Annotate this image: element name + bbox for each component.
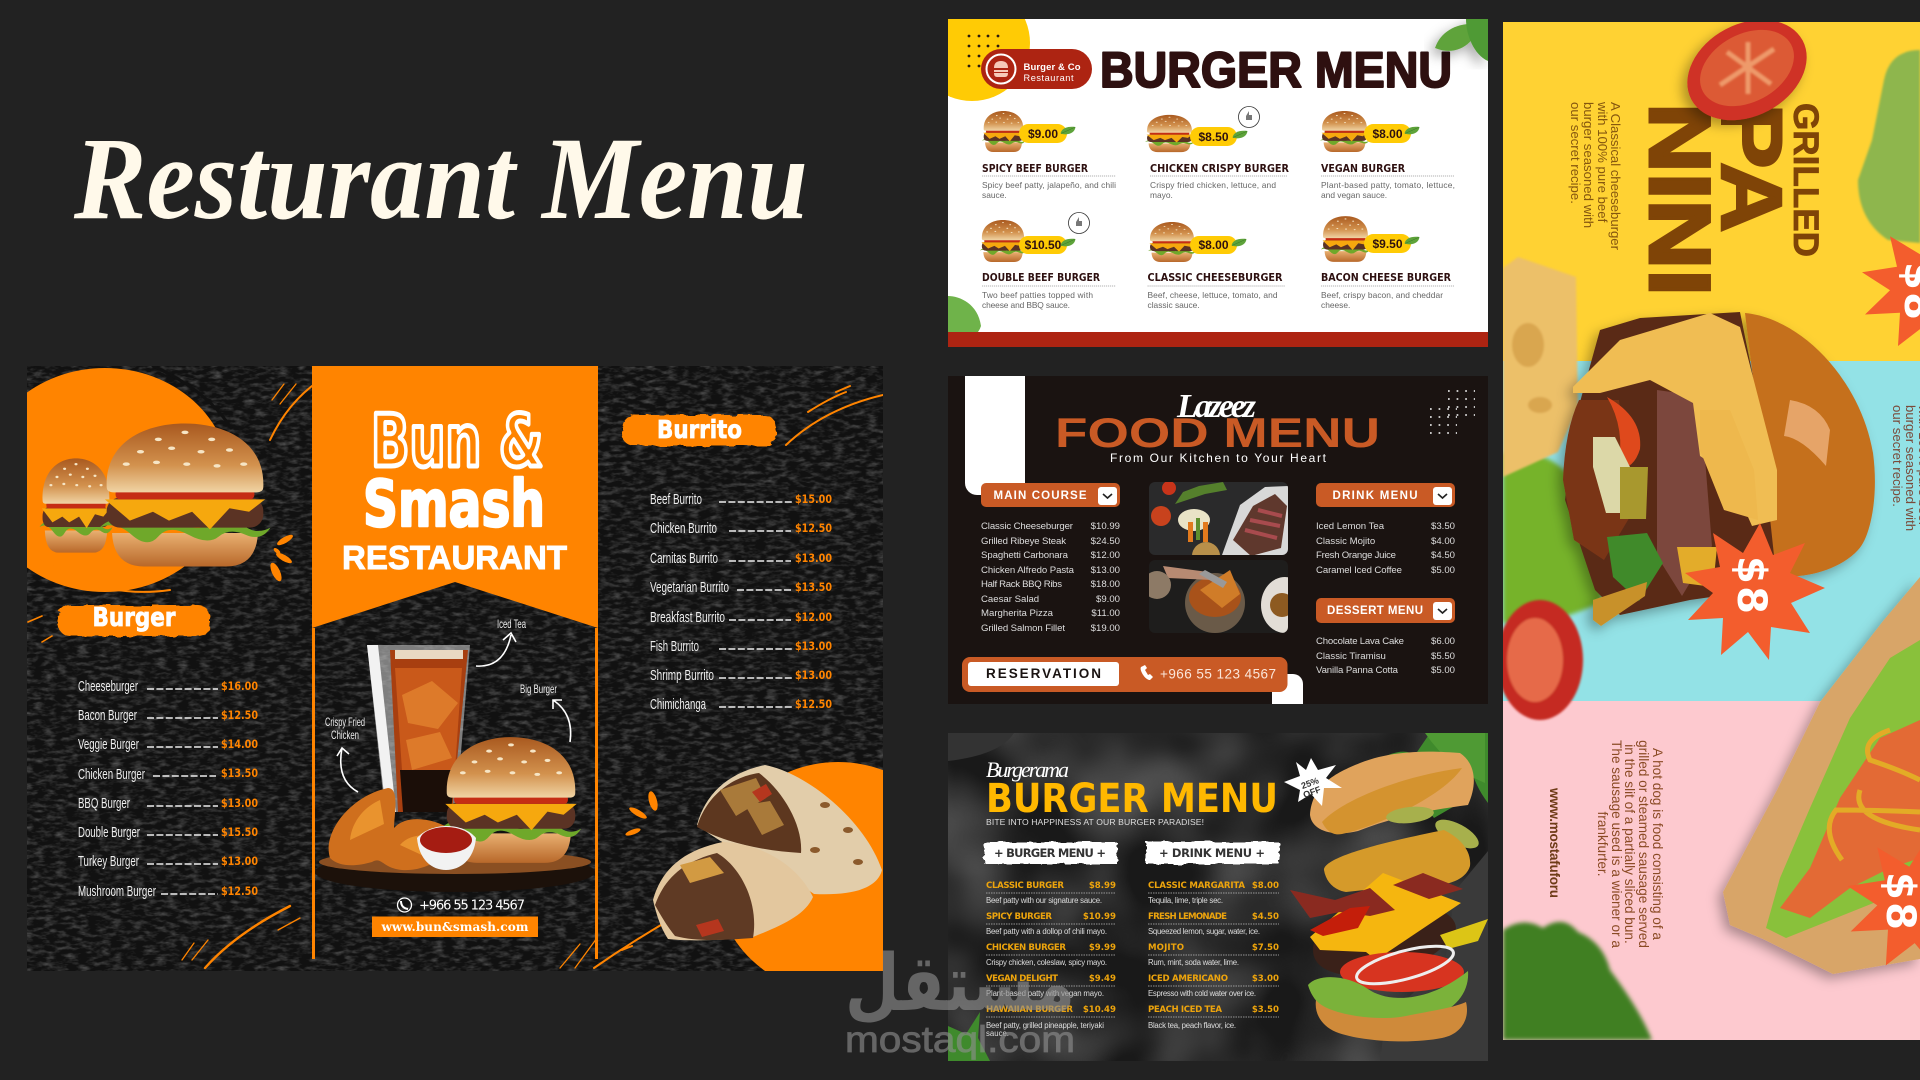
item: Chicken Crispy Burger: CHICKEN CRISPY BURGER: [1150, 163, 1289, 175]
icon: basil leaves bottom left: [948, 296, 981, 332]
description: blue panel: [1890, 404, 1920, 531]
burrito price list: Fish Burrito: [650, 638, 699, 655]
dessert menu list: Chocolate Lava Cake: [1316, 636, 1404, 647]
website text: www.mostafuforu: [1547, 787, 1562, 898]
drink list: $3.00: [1252, 974, 1279, 984]
website box: [372, 916, 538, 937]
section label: Burger: [58, 603, 210, 636]
bottom red bar: [948, 332, 1488, 347]
item: Spicy Beef Burger: sauce.: [982, 190, 1007, 200]
dessert menu list: $6.00: [1431, 636, 1455, 647]
burrito price list: $13.00: [795, 668, 832, 682]
burger list: $9.49: [1089, 974, 1116, 984]
starburst: 25% off: OFF: [1302, 784, 1323, 800]
burger list: Plant-based patty with vegan mayo.: [986, 989, 1104, 998]
white tab top: [965, 376, 1025, 495]
drink list: MOJITO: [1148, 943, 1184, 953]
heading: BURGER MENU: [1100, 42, 1452, 98]
item: Vegan Burger: Plant-based patty, tomato, lettuce,: [1321, 180, 1455, 190]
brand logo text: [344, 410, 568, 570]
item: Chicken Crispy Burger: $8.50: [1198, 130, 1229, 144]
item: Spicy Beef Burger: SPICY BEEF BURGER: [982, 163, 1088, 175]
brush streaks around circle: [28, 366, 883, 968]
burger price list: $12.50: [221, 884, 258, 898]
main course list: $11.00: [1091, 608, 1120, 619]
item: Bacon Cheese Burger: BACON CHEESE BURGER: [1321, 272, 1451, 284]
burrito price list: $12.50: [795, 521, 832, 535]
burger list: HAWAIIAN BURGER: [986, 1005, 1073, 1015]
item: Bacon Cheese Burger: $9.50: [1372, 237, 1403, 251]
item: Vegan Burger: $8.00: [1372, 127, 1403, 141]
description: panini: with 100% pure beef: [1595, 101, 1610, 223]
phone contact: +966 55 123 4567: [419, 898, 525, 914]
watermark: mostaql: [845, 939, 1075, 1060]
callout: Crispy Fried Chicken: Chicken: [331, 728, 359, 742]
price starburst: middle: $8: [1728, 556, 1774, 614]
main course list: Half Rack BBQ Ribs: [981, 579, 1062, 590]
burrito price list: $12.50: [795, 697, 832, 711]
item: Spicy Beef Burger: [982, 111, 1116, 200]
drink menu list: Caramel Iced Coffee: [1316, 565, 1402, 576]
burrito price list: Shrimp Burrito: [650, 667, 714, 684]
brand script: Lazeez: [1176, 388, 1257, 425]
drink menu list: $4.00: [1431, 536, 1455, 547]
item: Double Beef Burger: $10.50: [1025, 238, 1062, 252]
icon: grilled burger: [1563, 312, 1875, 626]
burrito price list: $15.00: [795, 492, 832, 506]
logo pill: Burger & Co: [1024, 62, 1081, 73]
drink list: Espresso with cold water over ice.: [1148, 989, 1256, 998]
orange circle behind burger: [27, 368, 216, 592]
burger price list: Chicken Burger: [78, 766, 145, 783]
price starburst: top: [1862, 227, 1920, 350]
main course list: $19.00: [1091, 623, 1120, 634]
dessert menu list: DESSERT MENU: [1327, 605, 1423, 617]
icon: large burger: [100, 424, 270, 566]
drink list: FRESH LEMONADE: [1148, 912, 1227, 922]
main course list: Classic Cheeseburger: [981, 521, 1074, 532]
drink menu list: DRINK MENU: [1332, 490, 1418, 502]
description: blue panel: our secret recipe.: [1890, 405, 1905, 507]
dessert menu list: $5.00: [1431, 665, 1455, 676]
heading: BURGER MENU: [986, 776, 1278, 822]
panel: Bun and Smash trifold menu: [27, 366, 883, 971]
watermark: mostaql: mostaql.com: [845, 1019, 1075, 1060]
burger list: $8.99: [1089, 881, 1116, 891]
burger price list: Double Burger: [78, 824, 140, 841]
item: Bacon Cheese Burger: [1321, 216, 1454, 310]
burger list: $10.49: [1083, 1005, 1116, 1015]
panel: Burgerama chalkboard menu: [948, 733, 1488, 1061]
burger list: $9.99: [1089, 943, 1116, 953]
burger price list: $15.50: [221, 825, 258, 839]
item: Vegan Burger: and vegan sauce.: [1321, 190, 1387, 200]
logo pill: Restaurant: [1024, 73, 1074, 83]
item: Classic Cheeseburger: classic sauce.: [1148, 300, 1200, 310]
drink list: PEACH ICED TEA: [1148, 1005, 1222, 1015]
icon: hot dog: [1723, 577, 1920, 974]
icon: small burger: [40, 458, 112, 553]
section label: Burger: Burger: [92, 603, 176, 633]
item: Vegan Burger: VEGAN BURGER: [1321, 163, 1405, 175]
leaves bottom left: [948, 1012, 990, 1061]
description: blue panel: burger seasoned with: [1903, 405, 1918, 531]
panel: Grilled Panini colour-block flyer: [1497, 0, 1920, 1040]
icon: tomato slice left: [1497, 600, 1583, 720]
price starburst: middle: [1685, 523, 1825, 660]
heading: GRILLED: GRILLED: [1786, 103, 1825, 257]
burger price list: Cheeseburger: [78, 678, 138, 695]
burger list: VEGAN DELIGHT: [986, 974, 1058, 984]
icon: lettuce left: [1503, 452, 1602, 623]
main course list: $13.00: [1091, 565, 1120, 576]
watermark: mostaql: مستقل: [845, 939, 1075, 1029]
item: Vegan Burger: [1320, 111, 1455, 200]
center column orange chevron header: [312, 366, 598, 628]
description: panini: A Classical cheeseburger: [1608, 102, 1623, 251]
main course list: Margherita Pizza: [981, 608, 1054, 619]
tagline: BITE INTO HAPPINESS AT OUR BURGER PARADISE!: [986, 817, 1204, 827]
main course list: Spaghetti Carbonara: [981, 550, 1069, 561]
main course list: MAIN COURSE: [994, 490, 1087, 502]
burger price list: Mushroom Burger: [78, 883, 156, 900]
callout: Big Burger: Big Burger: [520, 682, 557, 696]
starburst: 25% off: [1284, 758, 1342, 806]
description: hot dog: grilled or steamed sausage served: [1636, 740, 1651, 948]
drink menu list: $5.00: [1431, 565, 1455, 576]
heading: FOOD MENU: [1055, 409, 1380, 456]
callout: Crispy Fried Chicken: Crispy Fried: [325, 715, 365, 729]
item: Classic Cheeseburger: CLASSIC CHEESEBURGER: [1148, 272, 1282, 284]
dot pattern: [1430, 391, 1475, 433]
drink list: Tequila, lime, triple sec.: [1148, 896, 1223, 905]
item: Classic Cheeseburger: [1148, 222, 1285, 310]
dessert menu list: $5.50: [1431, 651, 1455, 662]
exploded burger illustration: [1290, 733, 1488, 1041]
burger price list: Turkey Burger: [78, 853, 139, 870]
burrito price list: Breakfast Burrito: [650, 609, 725, 626]
dot grid: [968, 35, 999, 67]
burrito price list: Vegetarian Burrito: [650, 579, 729, 596]
burger list: $10.99: [1083, 912, 1116, 922]
section label: Burrito: [622, 415, 776, 446]
icon: tomato slice top: [1670, 0, 1824, 140]
drink menu list: Iced Lemon Tea: [1316, 521, 1385, 532]
panel: white Burger Menu: [948, 19, 1488, 347]
brand logo text: RESTAURANT: [342, 539, 567, 576]
burger list: [986, 881, 1116, 1038]
burrito price list: $12.00: [795, 610, 832, 624]
logo pill: [981, 49, 1092, 89]
main course list: Grilled Salmon Fillet: [981, 623, 1065, 634]
item: Chicken Crispy Burger: Crispy fried chicken, lettuce, and: [1150, 180, 1276, 190]
main course list: $18.00: [1091, 579, 1120, 590]
drink menu list: $4.50: [1431, 550, 1455, 561]
brand script: Burgerama: [986, 757, 1069, 782]
burger list: Beef patty with a dollop of chili mayo.: [986, 927, 1107, 936]
drink list: Black tea, peach flavor, ice.: [1148, 1021, 1236, 1030]
drink list: [1148, 881, 1279, 1030]
drink list: $7.50: [1252, 943, 1279, 953]
item: Double Beef Burger: cheese and BBQ sauce.: [982, 300, 1070, 310]
burger price list: [78, 678, 258, 900]
description: hot dog: [1595, 740, 1665, 948]
burger list: Beef patty, grilled pineapple, teriyaki: [986, 1021, 1104, 1030]
main course list: $12.00: [1091, 550, 1120, 561]
drink list: $3.50: [1252, 1005, 1279, 1015]
orange circle behind burrito: [722, 762, 883, 971]
drink list: Rum, mint, soda water, lime.: [1148, 958, 1239, 967]
main course list: $24.50: [1091, 536, 1120, 547]
dessert menu list: Vanilla Panna Cotta: [1316, 665, 1399, 676]
item: Bacon Cheese Burger: cheese.: [1321, 300, 1350, 310]
website box: www.bun&smash.com: [380, 920, 529, 934]
section label: Burrito: Burrito: [657, 415, 742, 444]
icon: basil leaves top right: [1435, 19, 1488, 61]
reservation bar: [962, 657, 1288, 692]
brush label: burger menu: + BURGER MENU +: [994, 846, 1106, 860]
callout: Big Burger: [520, 682, 571, 742]
brush label: drink menu: + DRINK MENU +: [1159, 846, 1265, 860]
heading: PA: PA: [1703, 103, 1799, 233]
subtitle: From Our Kitchen to Your Heart: [1110, 451, 1327, 465]
icon: lettuce right: [1858, 50, 1920, 243]
brand logo text: Smash: [363, 468, 545, 542]
burger price list: Veggie Burger: [78, 736, 139, 753]
drink list: $4.50: [1252, 912, 1279, 922]
dessert menu list: [1316, 598, 1455, 676]
item: Chicken Crispy Burger: mayo.: [1150, 190, 1173, 200]
price starburst: bottom: [1847, 838, 1920, 970]
main course list: $9.00: [1096, 594, 1120, 605]
item: Bacon Cheese Burger: Beef, crispy bacon, and cheddar: [1321, 290, 1443, 300]
burger list: Crispy chicken, coleslaw, spicy mayo.: [986, 958, 1107, 967]
burger list: CLASSIC BURGER: [986, 881, 1064, 891]
panel: Lazeez Food Menu: [948, 376, 1488, 704]
item: Classic Cheeseburger: Beef, cheese, lettuce, tomato, and: [1148, 290, 1278, 300]
burrito price list: Chicken Burrito: [650, 520, 717, 537]
burger price list: $13.50: [221, 766, 258, 780]
drink list: Squeezed lemon, sugar, water, ice.: [1148, 927, 1260, 936]
burger price list: $12.50: [221, 708, 258, 722]
brush label: drink menu: [1146, 842, 1279, 864]
burger list: Beef patty with our signature sauce.: [986, 896, 1102, 905]
drink menu list: [1316, 483, 1455, 576]
main course list: [981, 483, 1120, 634]
main course list: Caesar Salad: [981, 594, 1039, 605]
item: Spicy Beef Burger: $9.00: [1028, 127, 1058, 141]
drink menu list: Classic Mojito: [1316, 536, 1375, 547]
main course list: $10.99: [1091, 521, 1120, 532]
burrito price list: Beef Burrito: [650, 491, 702, 508]
drink list: CLASSIC MARGARITA: [1148, 881, 1245, 891]
brand logo text: Bun &: [371, 399, 543, 483]
description: hot dog: A hot dog is food consisting of a: [1650, 748, 1665, 940]
callout: Iced Tea: [476, 617, 526, 666]
item: Double Beef Burger: [980, 212, 1116, 310]
burger price list: $16.00: [221, 679, 258, 693]
burrito price list: $13.50: [795, 580, 832, 594]
grey brush corners: [1380, 851, 1488, 1061]
burrito price list: Chimichanga: [650, 696, 706, 713]
burrito price list: $13.00: [795, 639, 832, 653]
burrito price list: Carnitas Burrito: [650, 550, 718, 567]
burger price list: $13.00: [221, 854, 258, 868]
description: hot dog: The sausage used is a wiener or a: [1609, 740, 1624, 948]
drink list: ICED AMERICANO: [1148, 974, 1228, 984]
drink menu list: $3.50: [1431, 521, 1455, 532]
description: panini: our secret recipe.: [1568, 102, 1583, 204]
title: Resturant Menu: [73, 113, 808, 244]
main course list: Chicken Alfredo Pasta: [981, 565, 1075, 576]
icon: cheese wedge: [1503, 257, 1578, 477]
reservation bar: +966 55 123 4567: [1160, 666, 1276, 682]
reservation bar: RESERVATION: [986, 666, 1101, 681]
burrito price list: [650, 491, 832, 713]
burrito splash marks: [625, 790, 659, 837]
item: Double Beef Burger: Two beef patties topped with: [982, 290, 1093, 300]
starburst: 25% off: 25%: [1300, 775, 1320, 791]
description: panini: [1568, 101, 1623, 251]
heading: NINI: NINI: [1631, 103, 1727, 296]
burger price list: $13.00: [221, 796, 258, 810]
photo: roast chicken platter: [1143, 560, 1309, 633]
description: hot dog: in the slit of a partially sliced bun.: [1622, 744, 1637, 944]
burger price list: BBQ Burger: [78, 795, 130, 812]
drink list: $8.00: [1252, 881, 1279, 891]
orange splash marks: [270, 534, 293, 582]
item: Chicken Crispy Burger: [1145, 106, 1289, 200]
icon: wrapped burritos: [653, 765, 882, 940]
burger price list: Bacon Burger: [78, 707, 137, 724]
meal illustration: iced tea, fried chicken, burger: [315, 645, 595, 892]
icon: lettuce bottom: [1503, 922, 1652, 1040]
photo: steak and vegetables: [1149, 481, 1288, 570]
description: hot dog: frankfurter.: [1595, 812, 1610, 876]
brush label: burger menu: [984, 842, 1117, 864]
white tab bottom: [1272, 674, 1303, 704]
item: Spicy Beef Burger: Spicy beef patty, jalapeño, and chili: [982, 180, 1116, 190]
description: panini: burger seasoned with: [1581, 102, 1596, 228]
callout: Crispy Fried Chicken: [325, 715, 365, 792]
drink menu list: Fresh Orange Juice: [1316, 550, 1396, 561]
burrito price list: $13.00: [795, 551, 832, 565]
callout: Iced Tea: Iced Tea: [497, 617, 526, 631]
burger list: SPICY BURGER: [986, 912, 1052, 922]
item: Classic Cheeseburger: $8.00: [1198, 238, 1229, 252]
burger list: CHICKEN BURGER: [986, 943, 1066, 953]
dessert menu list: Classic Tiramisu: [1316, 651, 1386, 662]
burger list: sauce.: [986, 1029, 1009, 1038]
burger price list: $14.00: [221, 737, 258, 751]
main course list: Grilled Ribeye Steak: [981, 536, 1066, 547]
item: Double Beef Burger: DOUBLE BEEF BURGER: [982, 272, 1100, 284]
